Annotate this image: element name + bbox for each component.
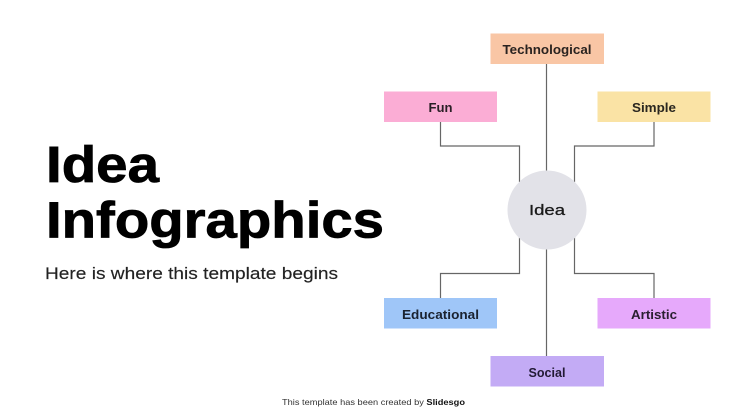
box: Artistic bbox=[598, 298, 710, 328]
central circle: Idea bbox=[508, 170, 586, 250]
central circle: Idea: Idea bbox=[529, 202, 566, 219]
title: Infographics bbox=[46, 192, 384, 248]
box: Fun bbox=[384, 92, 497, 122]
footer credit: This template has been created by Slidesgo bbox=[282, 397, 465, 407]
box: Social: Social bbox=[528, 365, 566, 380]
box: Educational: Educational bbox=[402, 307, 479, 322]
box: Artistic: Artistic bbox=[631, 307, 677, 322]
box: Educational bbox=[384, 298, 497, 328]
title bbox=[46, 136, 384, 248]
subtitle: Here is where this template begins bbox=[45, 264, 338, 283]
box: Social bbox=[490, 356, 604, 386]
box: Simple: Simple bbox=[632, 100, 676, 115]
box: Simple bbox=[598, 92, 710, 122]
box: Fun: Fun bbox=[428, 100, 453, 115]
connector lines bbox=[440, 64, 654, 356]
box: Technological: Technological bbox=[502, 42, 592, 57]
title: Idea bbox=[46, 136, 160, 193]
box: Technological bbox=[490, 34, 604, 64]
